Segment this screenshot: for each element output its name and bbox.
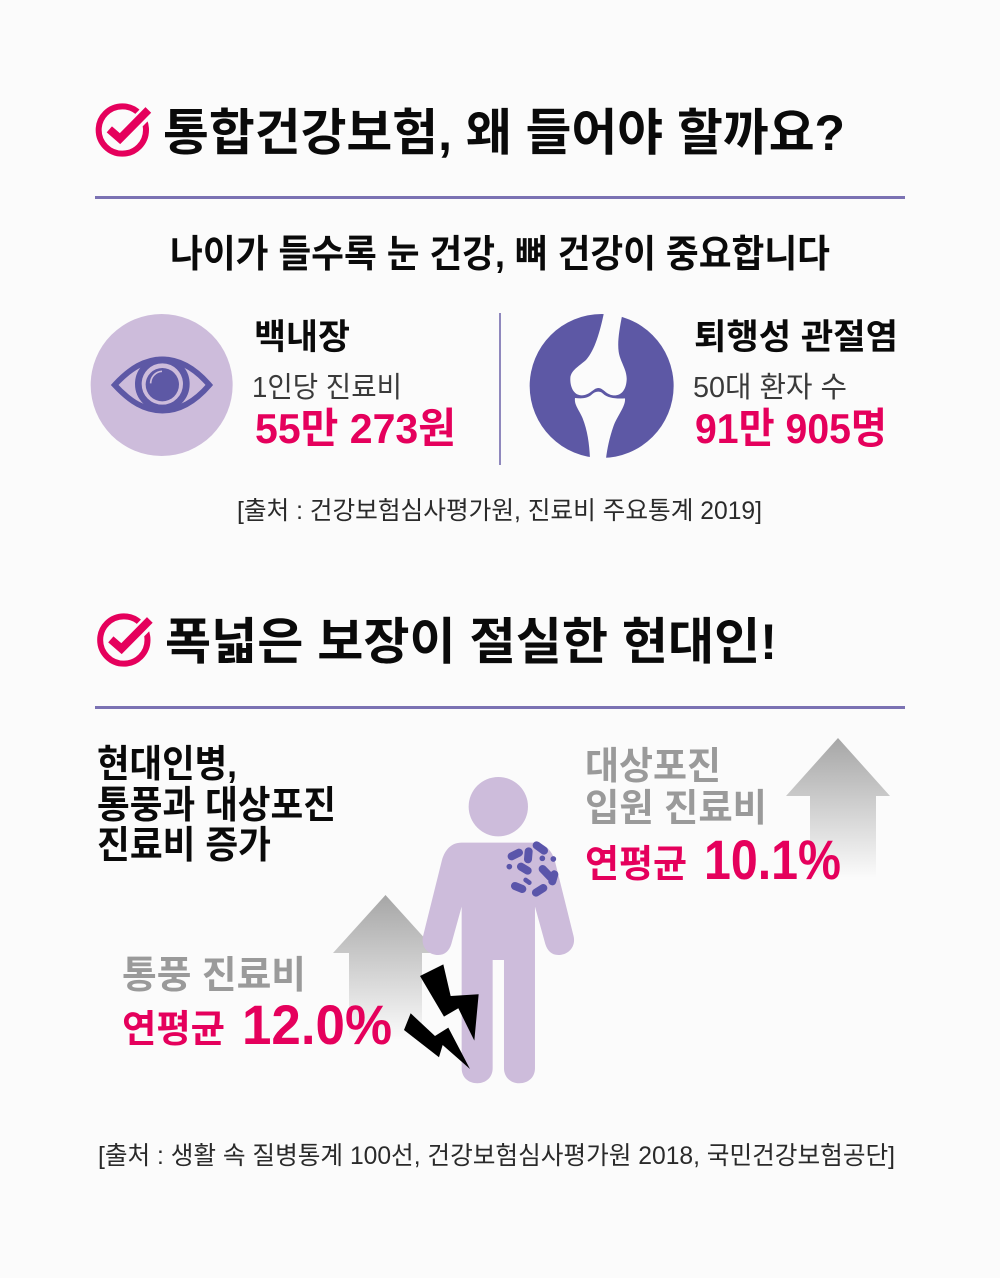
cataract label: 백내장 — [254, 318, 350, 357]
icon: shingles bacteria — [509, 845, 554, 893]
icon: check mark 2 — [100, 616, 150, 664]
source 1: [출처 : 건강보험심사평가원, 진료비 주요통계 2019] — [237, 497, 762, 525]
callout: gout cost: 연평균 — [122, 1009, 225, 1051]
icon: knee joint — [530, 313, 674, 459]
callout: gout cost — [122, 955, 392, 1056]
callout: shingles cost: 입원 진료비 — [585, 788, 767, 830]
subtitle: 나이가 들수록 눈 건강, 뼈 건강이 중요합니다 — [170, 234, 830, 276]
arrow: gout up — [333, 895, 438, 1040]
callout: shingles cost: 연평균 — [585, 844, 687, 886]
callout: gout cost: 통풍 진료비 — [122, 955, 306, 997]
osteoarthritis label: 퇴행성 관절염 — [694, 318, 898, 357]
callout: gout cost: 12.0% — [242, 993, 392, 1056]
text block: modern disease costs rising: 통풍과 대상포진 — [97, 785, 336, 827]
icon: pain lightning bolts — [404, 964, 479, 1069]
cataract cost value: 55만 273원 — [255, 405, 456, 452]
heading: section 2 title: 폭넓은 보장이 절실한 현대인! — [165, 614, 777, 670]
callout: shingles cost: 10.1% — [704, 828, 841, 891]
text block: modern disease costs rising — [97, 744, 336, 867]
patients value: 91만 905명 — [695, 405, 887, 452]
callout: shingles cost — [585, 746, 841, 891]
icon: check mark 1 — [99, 106, 148, 154]
heading: section 1 title: 통합건강보험, 왜 들어야 할까요? — [163, 105, 845, 161]
panel: cataract — [91, 314, 456, 456]
text block: modern disease costs rising: 현대인병, — [97, 744, 237, 786]
icon: eye — [91, 314, 233, 456]
arrow: shingles up — [786, 738, 890, 878]
figure: person with shingles and gout — [423, 777, 574, 1083]
source 2: [출처 : 생활 속 질병통계 100선, 건강보험심사평가원 2018, 국민건강보험공단] — [98, 1142, 895, 1170]
patients label: 50대 환자 수 — [693, 371, 847, 404]
cataract cost label: 1인당 진료비 — [252, 372, 402, 404]
panel: osteoarthritis — [530, 313, 898, 459]
text block: modern disease costs rising: 진료비 증가 — [97, 825, 271, 867]
callout: shingles cost: 대상포진 — [585, 746, 721, 788]
